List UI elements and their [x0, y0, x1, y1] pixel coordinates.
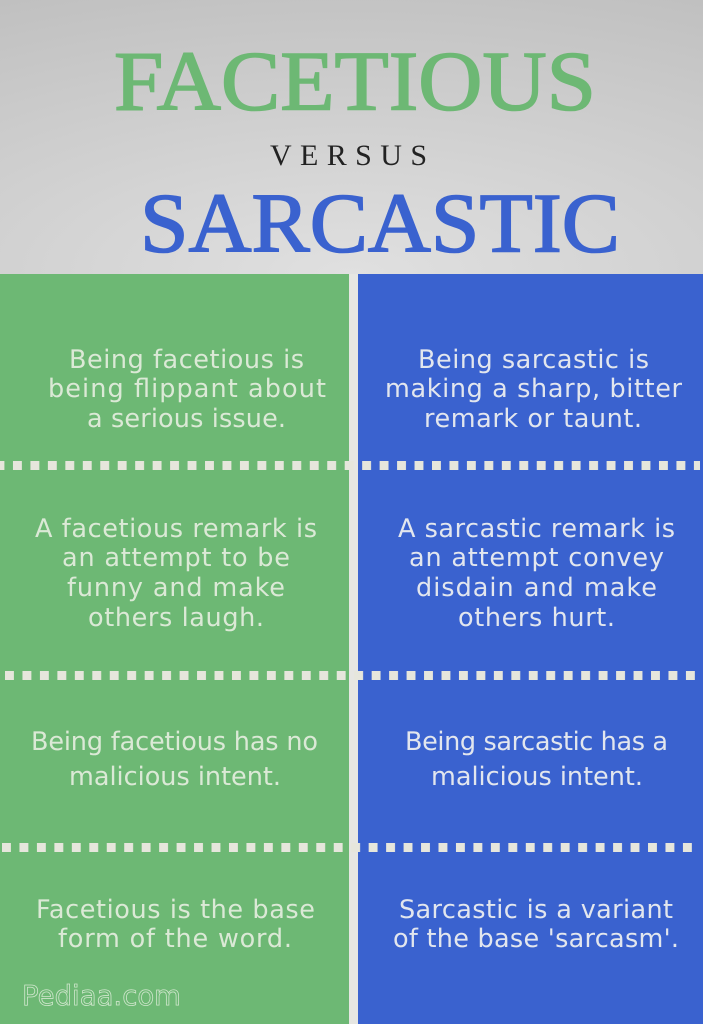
text block: facetious definition: Being facetious is [69, 345, 304, 375]
text block: sarcastic remark: A sarcastic remark is [398, 514, 675, 544]
text block: facetious word form [36, 895, 315, 954]
watermark: Pediaa.com: Pediaa.com [22, 979, 181, 1012]
text block: facetious intent: Being facetious has no [31, 727, 318, 757]
text block: sarcastic remark: disdain and make [416, 573, 657, 603]
text block: facetious definition: a serious issue. [87, 404, 286, 434]
text block: sarcastic word form: Sarcastic is a variant [399, 895, 673, 925]
text block: sarcastic remark [398, 514, 675, 633]
text block: facetious intent [31, 727, 318, 792]
text block: sarcastic word form: of the base 'sarcasm'. [393, 924, 679, 954]
text block: facetious definition: being flippant about [48, 374, 326, 404]
subtitle: versus: VERSUS [270, 139, 427, 172]
text block: facetious definition [48, 345, 326, 434]
text block: sarcastic intent: Being sarcastic has a [405, 727, 668, 757]
text block: facetious remark: others laugh. [88, 603, 264, 633]
text block: facetious intent: malicious intent. [69, 762, 281, 792]
text block: sarcastic definition: remark or taunt. [424, 404, 642, 434]
text block: facetious remark: funny and make [67, 573, 285, 603]
text block: sarcastic definition [385, 345, 683, 434]
text block: sarcastic definition: making a sharp, bitter [385, 374, 683, 404]
text block: facetious remark: A facetious remark is [35, 514, 317, 544]
text block: facetious remark [35, 514, 317, 633]
text block: sarcastic intent: malicious intent. [431, 762, 643, 792]
text block: sarcastic intent [405, 727, 668, 792]
panel: facetious column [0, 274, 349, 1024]
title: sarcastic: SARCASTIC [140, 176, 620, 270]
text block: sarcastic word form [393, 895, 679, 954]
title: facetious: FACETIOUS [114, 34, 596, 128]
text block: facetious word form: Facetious is the base [36, 895, 315, 925]
text block: sarcastic definition: Being sarcastic is [418, 345, 649, 375]
text block: sarcastic remark: others hurt. [458, 603, 615, 633]
panel: sarcastic column [358, 274, 703, 1024]
text block: facetious word form: form of the word. [58, 924, 292, 954]
text block: facetious remark: an attempt to be [62, 543, 290, 573]
text block: sarcastic remark: an attempt convey [409, 543, 664, 573]
